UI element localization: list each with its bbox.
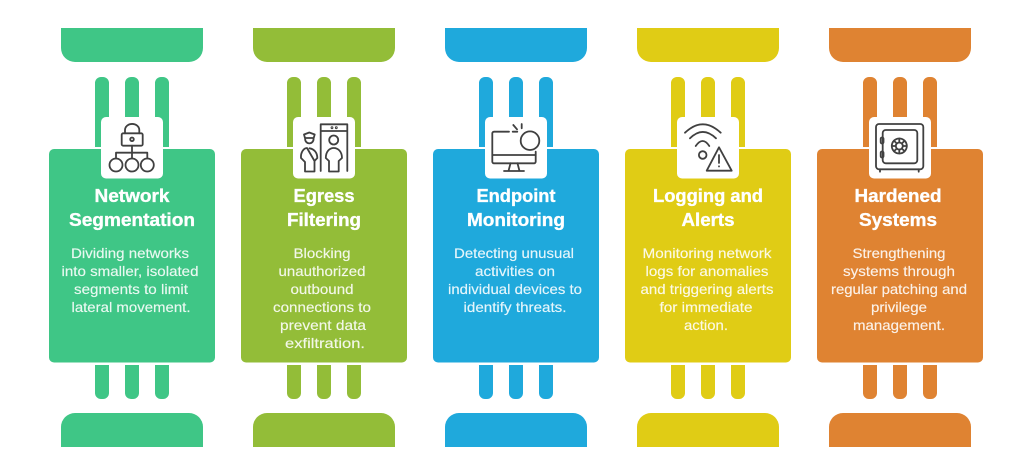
top cap (445, 28, 587, 62)
icon: monitor with magnifier (492, 124, 539, 171)
bottom cap (829, 413, 971, 447)
bottom cap (253, 413, 395, 447)
description: segments to limit (74, 281, 188, 297)
heading: Alerts (682, 210, 734, 230)
bottom connector bars (479, 365, 553, 399)
card (817, 149, 983, 362)
top cap (637, 28, 779, 62)
description: Strengthening (852, 245, 946, 261)
description: Detecting unusual (454, 245, 574, 261)
panel: network segmentation (49, 28, 215, 447)
description: lateral movement. (72, 299, 190, 315)
bottom cap (637, 413, 779, 447)
icon: wifi with warning triangle (685, 124, 732, 171)
card (241, 149, 407, 362)
description: into smaller, isolated (62, 263, 198, 279)
top connector bars (863, 77, 937, 147)
description: connections to (273, 299, 371, 315)
panel: egress filtering (241, 28, 407, 447)
heading: Logging and (653, 186, 763, 206)
top connector bars (671, 77, 745, 147)
icon tile (869, 117, 931, 178)
heading (854, 186, 942, 230)
description: and triggering alerts (640, 281, 774, 297)
description (273, 245, 371, 351)
card (49, 149, 215, 362)
top connector bars (479, 77, 553, 147)
description: Dividing networks (71, 245, 189, 261)
description: privilege (871, 299, 927, 315)
description: action. (684, 317, 728, 333)
description: unauthorized (278, 263, 366, 279)
icon tile (101, 117, 163, 178)
description: activities on (475, 263, 555, 279)
icon: guard and security gate (301, 124, 347, 172)
panel: hardened systems (817, 28, 983, 447)
bottom connector bars (671, 365, 745, 399)
description: Monitoring network (642, 245, 773, 261)
heading (653, 186, 763, 230)
heading (287, 186, 361, 230)
heading: Segmentation (69, 210, 195, 230)
heading: Hardened (854, 186, 942, 206)
card (433, 149, 599, 362)
description: outbound (290, 281, 354, 297)
heading (69, 186, 195, 230)
heading: Monitoring (467, 210, 565, 230)
heading: Egress (294, 186, 354, 206)
description: exfiltration. (285, 335, 365, 351)
top cap (829, 28, 971, 62)
panel: logging and alerts (625, 28, 791, 447)
description (640, 245, 774, 333)
description (62, 245, 198, 315)
description (448, 245, 582, 315)
card (625, 149, 791, 362)
bottom connector bars (287, 365, 361, 399)
icon: padlock network (110, 124, 154, 172)
description: regular patching and (831, 281, 967, 297)
icon tile (485, 117, 547, 178)
description: systems through (843, 263, 955, 279)
description: individual devices to (448, 281, 582, 297)
description: Blocking (294, 245, 350, 261)
bottom connector bars (95, 365, 169, 399)
icon tile (293, 117, 355, 178)
heading: Endpoint (476, 186, 556, 206)
heading: Network (94, 186, 171, 206)
top connector bars (287, 77, 361, 147)
bottom connector bars (863, 365, 937, 399)
icon: safe (876, 124, 923, 172)
heading (467, 186, 565, 230)
panel: endpoint monitoring (433, 28, 599, 447)
top cap (253, 28, 395, 62)
description: identify threats. (464, 299, 566, 315)
heading: Systems (859, 210, 937, 230)
bottom cap (445, 413, 587, 447)
bottom cap (61, 413, 203, 447)
description: prevent data (280, 317, 366, 333)
icon tile (677, 117, 739, 178)
heading: Filtering (287, 210, 361, 230)
top connector bars (95, 77, 169, 147)
description: logs for anomalies (646, 263, 768, 279)
top cap (61, 28, 203, 62)
description (831, 245, 967, 333)
description: for immediate (660, 299, 753, 315)
description: management. (853, 317, 945, 333)
